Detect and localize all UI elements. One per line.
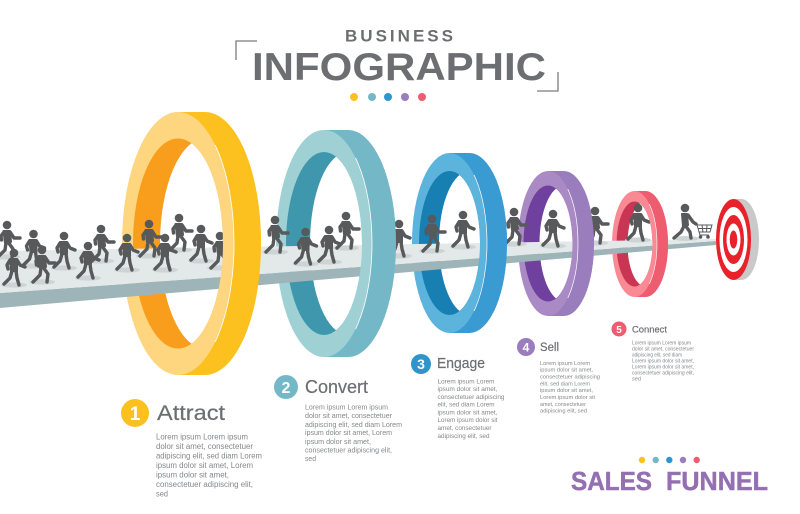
text block convert: dolor sit amet, consectetuer bbox=[305, 411, 393, 420]
badge 3: 3 bbox=[417, 356, 425, 372]
text block sell: elit, sed diam Lorem bbox=[540, 381, 590, 387]
badge 2: 2 bbox=[282, 380, 291, 397]
title: business infographic bbox=[236, 26, 558, 101]
text block engage bbox=[438, 378, 505, 440]
text block convert: ipsum dolor sit amet, bbox=[305, 437, 371, 446]
step 5: connect bbox=[612, 322, 694, 382]
text block connect: Lorem ipsum dolor sit amet, bbox=[632, 365, 694, 371]
heading sell: Sell bbox=[540, 342, 559, 354]
icon: target bbox=[716, 199, 759, 280]
icon: shopping cart bbox=[694, 222, 712, 238]
badge 1: 1 bbox=[130, 404, 141, 425]
text block attract: ipsum dolor sit amet, Lorem bbox=[156, 461, 253, 470]
ring 2: teal convert bbox=[276, 130, 396, 357]
person pushing shopping cart bbox=[673, 204, 712, 241]
text block connect: adipiscing elit, sed diam bbox=[632, 352, 682, 358]
ring 1: yellow attract bbox=[122, 112, 261, 375]
heading sales: SALES bbox=[571, 466, 652, 496]
text block convert: Lorem ipsum Lorem ipsum bbox=[305, 402, 388, 412]
text block attract: consectetuer adipiscing elit, bbox=[156, 480, 253, 489]
text block convert bbox=[305, 402, 402, 463]
badge 1 bbox=[121, 399, 149, 427]
text block attract: Lorem ipsum Lorem ipsum bbox=[156, 432, 248, 442]
step 3: engage bbox=[411, 354, 505, 440]
text block connect: dolor sit amet, consectetuer bbox=[632, 347, 694, 353]
heading convert: Convert bbox=[305, 377, 368, 397]
text block sell: Lorem ipsum Lorem bbox=[540, 361, 590, 367]
text block engage: consectetuer adipiscing bbox=[438, 394, 505, 401]
text block convert: consectetuer adipiscing elit, bbox=[305, 446, 392, 454]
text block engage: Lorem ipsum dolor sit bbox=[438, 417, 498, 424]
step 2: convert bbox=[274, 375, 402, 463]
text block engage: ipsum dolor sit amet, bbox=[438, 386, 498, 393]
text block attract bbox=[156, 432, 262, 498]
text block connect: sed bbox=[632, 376, 641, 382]
heading: infographic: INFOGRAPHIC bbox=[252, 46, 546, 89]
text block connect: Lorem ipsum dolor sit amet, bbox=[632, 358, 694, 364]
heading connect: Connect bbox=[632, 324, 667, 336]
text block attract: dolor sit amet, consectetuer bbox=[156, 442, 253, 451]
text block sell: consectetuer adipiscing bbox=[540, 375, 600, 381]
text block sell: Lorem ipsum dolor sit bbox=[540, 395, 595, 401]
ring 2 near side overlay bbox=[338, 158, 396, 329]
text block convert: adipiscing elit, sed diam Lorem bbox=[305, 420, 402, 429]
ring 3: blue engage bbox=[412, 153, 507, 333]
text block convert: ipsum dolor sit amet, Lorem bbox=[305, 428, 392, 437]
text block sell: ipsum dolor sit amet, bbox=[540, 368, 593, 374]
text block engage: ipsum dolor sit amet, bbox=[438, 410, 498, 416]
road walkway bbox=[0, 239, 716, 308]
text block sell: adipiscing elit, sed bbox=[540, 409, 587, 415]
text block convert: sed bbox=[305, 454, 316, 463]
text block attract: ipsum dolor sit amet, bbox=[156, 470, 229, 480]
text block engage: elit, sed diam Lorem bbox=[438, 402, 494, 408]
text block sell: ipsum dolor sit amet, bbox=[540, 388, 593, 394]
crowd of walking people bbox=[0, 204, 651, 288]
text block connect: consectetuer adipiscing elit, bbox=[632, 370, 694, 376]
text block attract: sed bbox=[156, 490, 168, 498]
ring 4: purple sell bbox=[518, 171, 594, 316]
badge 4: 4 bbox=[523, 340, 530, 354]
title bracket top left bbox=[236, 41, 257, 60]
text block sell bbox=[540, 361, 600, 415]
text block engage: adipiscing elit, sed bbox=[438, 433, 490, 440]
sales funnel footer bbox=[571, 457, 768, 496]
badge 5: 5 bbox=[616, 325, 622, 336]
ring 1 near side overlay bbox=[194, 145, 261, 342]
title bracket bottom right bbox=[537, 72, 558, 91]
heading funnel: FUNNEL bbox=[666, 466, 768, 496]
ring 5: red connect bbox=[612, 191, 668, 297]
title colour dots bbox=[350, 93, 426, 101]
text block connect bbox=[632, 341, 694, 382]
ring 5 near side overlay bbox=[640, 204, 668, 284]
text block connect: Lorem ipsum Lorem ipsum bbox=[632, 341, 691, 347]
text block engage: Lorem ipsum Lorem bbox=[438, 378, 494, 386]
footer colour dots bbox=[639, 457, 700, 463]
ring 4 near side overlay bbox=[556, 189, 594, 298]
heading engage: Engage bbox=[437, 355, 485, 372]
heading: business: BUSINESS bbox=[345, 26, 453, 46]
step 4: sell bbox=[517, 338, 600, 415]
ring 3 near side overlay bbox=[460, 175, 507, 311]
step 1: attract bbox=[121, 399, 262, 498]
text block engage: amet, consectetuer bbox=[438, 425, 492, 432]
heading attract: Attract bbox=[157, 402, 225, 425]
text block attract: adipiscing elit, sed diam Lorem bbox=[156, 452, 262, 460]
text block sell: amet, consectetuer bbox=[540, 402, 586, 408]
